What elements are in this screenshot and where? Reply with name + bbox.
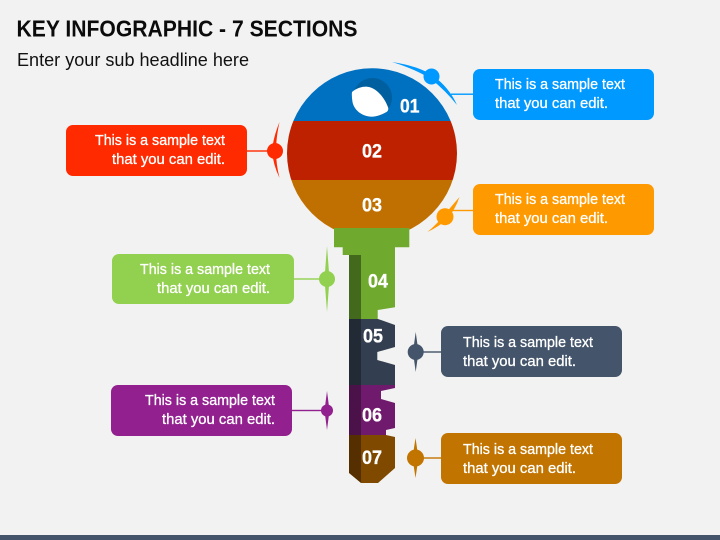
number 07: 07 xyxy=(362,448,382,469)
callout 06 xyxy=(111,385,333,436)
connector 06 xyxy=(292,391,333,430)
number 02: 02 xyxy=(362,142,382,162)
connector 03 xyxy=(428,197,474,232)
box 07: This is a sample text xyxy=(463,442,593,458)
callout 07 xyxy=(407,433,622,484)
key stem: section 07 xyxy=(349,435,395,483)
key stem: section 06 xyxy=(349,385,395,435)
box 03: This is a sample text xyxy=(495,192,625,208)
footer bar xyxy=(0,535,720,540)
box 06 xyxy=(111,385,292,436)
number 06: 06 xyxy=(362,406,382,426)
key illustration xyxy=(287,68,457,483)
box 05: that you can edit. xyxy=(463,354,576,370)
box 04: that you can edit. xyxy=(157,281,270,297)
box 02 xyxy=(66,125,247,176)
box 02: This is a sample text xyxy=(95,133,225,149)
box 07 xyxy=(441,433,622,484)
number 05: 05 xyxy=(363,326,383,348)
number 01: 01 xyxy=(400,96,420,118)
callout 03 xyxy=(428,184,654,235)
box 01 xyxy=(473,69,654,120)
box 06: that you can edit. xyxy=(162,412,275,428)
title: KEY INFOGRAPHIC - 7 SECTIONS xyxy=(16,16,358,42)
icon: keyhole xyxy=(352,78,392,117)
connector 04 xyxy=(294,246,335,312)
number 03: 03 xyxy=(362,196,382,216)
key head: section 01 xyxy=(287,68,457,121)
callout 04 xyxy=(112,246,335,312)
box 04: This is a sample text xyxy=(140,262,270,278)
key stem: section 04 xyxy=(334,228,409,319)
box 03: that you can edit. xyxy=(495,211,608,227)
key stem: section 05 xyxy=(349,319,395,385)
subtitle: Enter your sub headline here xyxy=(17,50,249,70)
key head: section 03 xyxy=(291,180,453,230)
box 06: This is a sample text xyxy=(145,393,275,409)
box 02: that you can edit. xyxy=(112,152,225,168)
callout 05 xyxy=(408,326,622,377)
callout 02 xyxy=(66,122,283,178)
box 05: This is a sample text xyxy=(463,335,593,351)
box 04 xyxy=(112,254,294,304)
callout 01 xyxy=(392,62,654,120)
box 07: that you can edit. xyxy=(463,461,576,477)
number 04: 04 xyxy=(368,272,388,292)
box 05 xyxy=(441,326,622,377)
connector 05 xyxy=(408,332,442,372)
box 01: that you can edit. xyxy=(495,96,608,112)
box 03 xyxy=(473,184,654,235)
key head: section 02 xyxy=(287,121,457,180)
connector 01 xyxy=(392,62,474,105)
connector 07 xyxy=(407,438,442,478)
connector 02 xyxy=(247,122,283,178)
box 01: This is a sample text xyxy=(495,77,625,93)
